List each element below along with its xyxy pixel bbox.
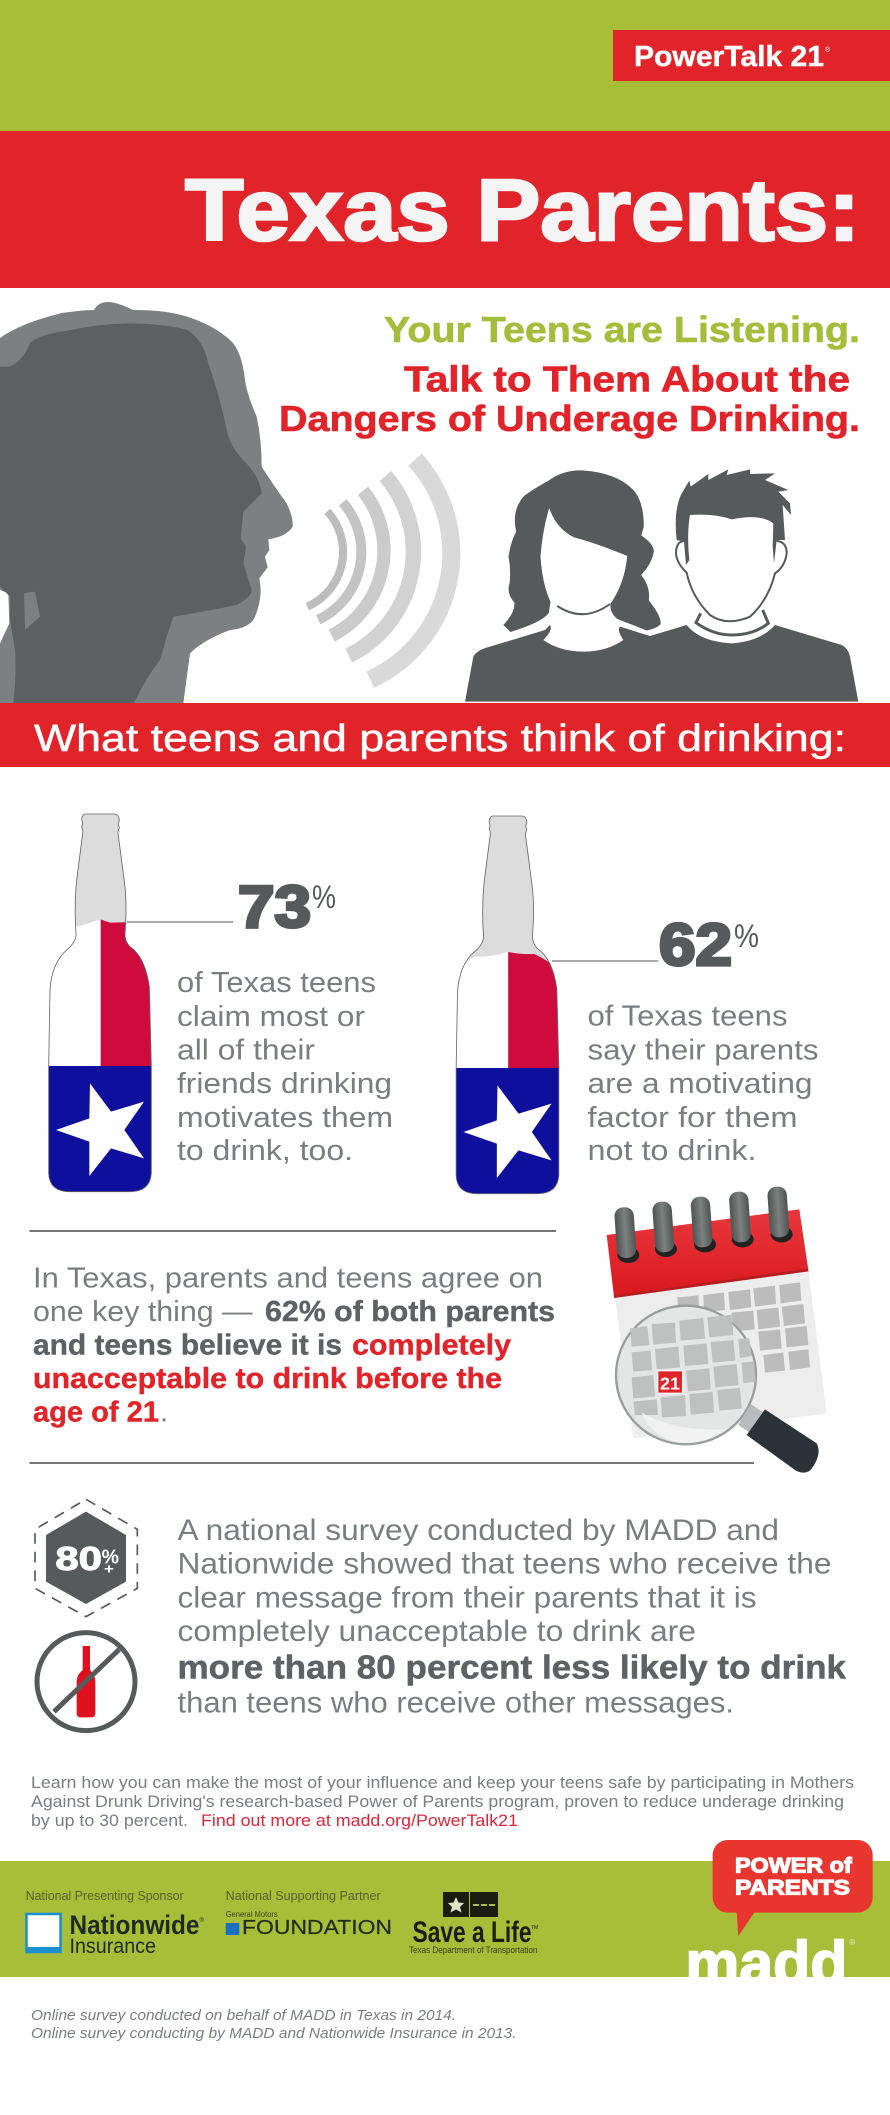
- text: parents and teens agree: one key thing —: [33, 1296, 253, 1328]
- stat: 73 percent: [238, 874, 336, 940]
- text: parents and teens agree: unacceptable to drink before the: [33, 1363, 502, 1395]
- text: parents motivate: factor for them: [588, 1102, 798, 1134]
- icon: 80 percent hexagon: %: [102, 1545, 119, 1568]
- text: national survey: [178, 1514, 847, 1720]
- text: national survey: than teens who receive other messages.: [178, 1686, 734, 1720]
- icon: 80 percent hexagon: 80: [55, 1541, 102, 1578]
- text: national survey: more than 80 percent less likely to drink: [178, 1648, 847, 1686]
- text: teens friends: claim most or: [177, 1001, 365, 1033]
- logo: madd: madd: [685, 1929, 847, 1998]
- title band: [0, 131, 890, 288]
- text: parents and teens agree: age of 21: [33, 1396, 159, 1428]
- icon: Texas flag bottle 73 percent: [47, 810, 153, 1194]
- footnotes: Online survey conducting by MADD and Nationwide Insurance in 2013.: [31, 2026, 516, 2042]
- text: teens friends: to drink, too.: [177, 1135, 353, 1167]
- logo: Nationwide Insurance: ®: [200, 1917, 204, 1924]
- logo: Save a Life: [409, 1892, 538, 1956]
- sponsor labels: [26, 1889, 381, 1903]
- text: parents and teens agree: In Texas, parents and teens agree on: [33, 1262, 543, 1294]
- logo: Nationwide Insurance: [26, 1910, 204, 1958]
- PowerTalk 21 badge: PowerTalk 21: [634, 41, 824, 73]
- text: teens friends: [177, 967, 393, 1167]
- stat: 62 percent: [659, 912, 759, 978]
- logo: General Motors Foundation: FOUNDATION: [242, 1917, 392, 1939]
- text: parents and teens agree: completely: [352, 1330, 511, 1362]
- logo: Save a Life: Save a Life: [412, 1916, 532, 1949]
- text: national survey: completely unacceptable to drink are: [178, 1615, 696, 1648]
- footnotes: Online survey conducted on behalf of MADD in Texas in 2014.: [31, 2008, 456, 2024]
- text: parents motivate: of Texas teens: [588, 1000, 788, 1032]
- logo: Save a Life: TM: [531, 1925, 538, 1931]
- text: teens friends: all of their: [177, 1034, 315, 1066]
- text: learn more: [31, 1774, 854, 1830]
- text: parents motivate: are a motivating: [588, 1068, 812, 1100]
- footnotes: [31, 2008, 516, 2042]
- text: parents and teens agree: .: [160, 1396, 168, 1428]
- section heading band: [0, 703, 890, 767]
- text: teens friends: of Texas teens: [177, 967, 376, 999]
- top green header band: [0, 0, 890, 131]
- stat: 62 percent: 62: [659, 912, 732, 978]
- text: teens friends: friends drinking: [177, 1068, 392, 1100]
- sponsor band: [0, 1861, 890, 1977]
- text: national survey: Nationwide showed that teens who receive the: [178, 1548, 832, 1580]
- text: parents and teens agree: [33, 1262, 555, 1428]
- icon: calendar with magnifier: 21: [660, 1373, 680, 1393]
- icon: two teens: [465, 469, 858, 702]
- text: learn more: Against Drunk Driving's research-based Power of Parents program, proven to reduce underage drinking: [31, 1793, 844, 1811]
- stat: 62 percent: %: [734, 918, 759, 954]
- logo: madd: [688, 1938, 856, 1977]
- text: parents and teens agree: 62% of both parents: [265, 1296, 555, 1328]
- icon: sound waves: [307, 460, 451, 680]
- stat: 73 percent: %: [312, 879, 336, 915]
- sponsor labels: National Supporting Partner: [226, 1889, 381, 1903]
- icon: 80 percent hexagon: [35, 1499, 137, 1617]
- sponsor labels: National Presenting Sponsor: [26, 1889, 184, 1903]
- text: national survey: A national survey conducted by MADD and: [178, 1514, 779, 1547]
- subtitle: Dangers of Underage Drinking.: [279, 398, 860, 439]
- logo: Power of Parents bubble: POWER of: [735, 1853, 853, 1877]
- text: national survey: clear message from their parents that it is: [178, 1582, 756, 1614]
- text: parents and teens agree: and teens believe it is: [33, 1330, 342, 1362]
- logo: Save a Life: Texas Department of Transportation: [409, 1945, 538, 1956]
- text: learn more: by up to 30 percent.: [31, 1812, 188, 1830]
- icon: no drinking sign: [37, 1633, 135, 1731]
- stat leader line 73: [127, 921, 233, 923]
- logo: General Motors Foundation: [226, 1910, 392, 1939]
- stat leader line 62: [552, 960, 658, 962]
- text: parents motivate: not to drink.: [588, 1135, 756, 1167]
- icon: calendar with magnifier: [607, 1186, 827, 1473]
- title band: Texas Parents:: [185, 162, 860, 259]
- PowerTalk 21 badge: [613, 30, 890, 81]
- subtitle: Your Teens are Listening.: [384, 309, 860, 350]
- logo: Nationwide Insurance: Insurance: [70, 1935, 156, 1958]
- subtitle: Talk to Them About the: [404, 358, 850, 400]
- logo: General Motors Foundation: General Motors: [226, 1910, 278, 1919]
- logo: madd: ®: [849, 1938, 855, 1947]
- text: learn more: Find out more at madd.org/PowerTalk21: [201, 1812, 518, 1830]
- icon: parent head silhouette: [0, 302, 293, 703]
- text: teens friends: motivates them: [177, 1102, 393, 1134]
- subtitle: [279, 309, 860, 439]
- text: parents motivate: say their parents: [588, 1034, 818, 1066]
- logo: Power of Parents bubble: [713, 1840, 873, 1936]
- logo: Nationwide Insurance: Nationwide: [70, 1910, 200, 1940]
- PowerTalk 21 badge: ®: [825, 46, 831, 54]
- icon: 80 percent hexagon: +: [104, 1560, 114, 1576]
- section heading band: What teens and parents think of drinking:: [34, 718, 846, 760]
- text: learn more: Learn how you can make the most of your influence and keep your teens safe by participating in Mothers: [31, 1774, 854, 1792]
- stat: 73 percent: 73: [238, 874, 311, 940]
- icon: Texas flag bottle 62 percent: [454, 812, 561, 1196]
- logo: Power of Parents bubble: PARENTS: [735, 1875, 850, 1899]
- text: parents motivate: [588, 1000, 818, 1167]
